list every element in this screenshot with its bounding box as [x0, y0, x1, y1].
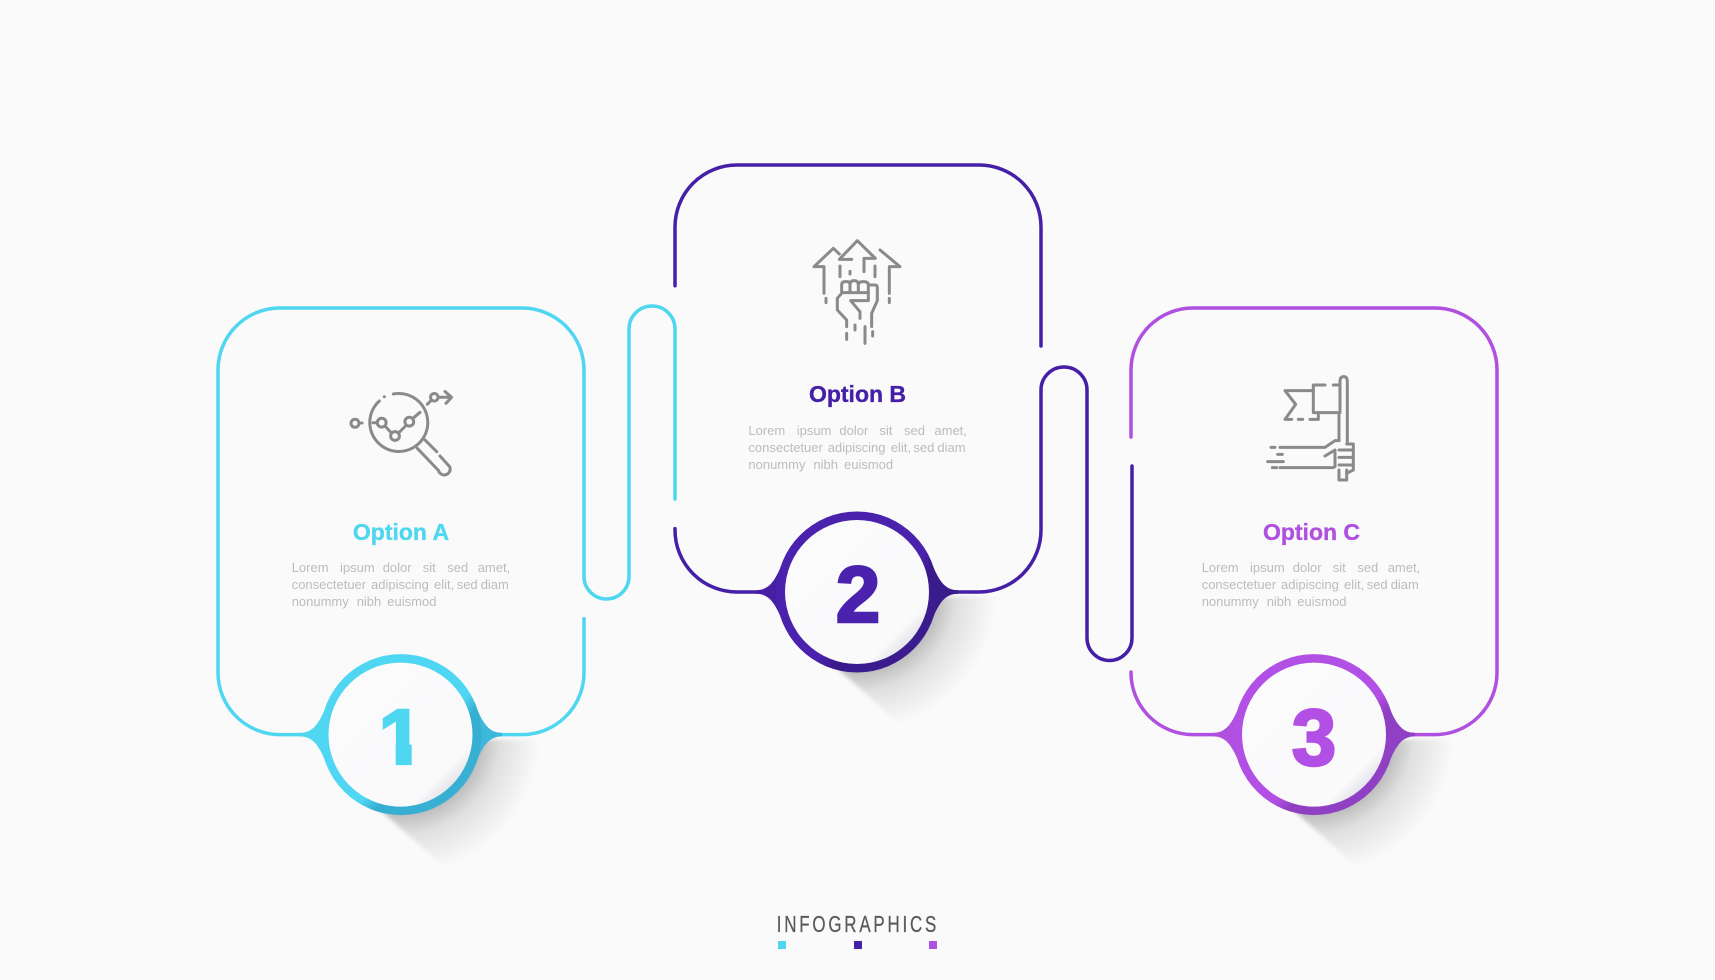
body text: option A: adipiscing: [371, 577, 432, 592]
number badge 1: 1: [378, 693, 423, 782]
icon: hand holding flag: [1268, 377, 1353, 480]
body text: option C: nibh: [1267, 594, 1295, 609]
legend squares: [778, 941, 937, 949]
body text: option B: ipsum: [797, 423, 835, 438]
body text: option C: adipiscing: [1281, 577, 1342, 592]
body text: option B: dolor: [839, 423, 872, 438]
body text: option C: diam: [1391, 577, 1419, 592]
body text: option C: elit,: [1344, 577, 1368, 592]
title: Option B: Option B: [809, 381, 906, 407]
body text: option B: diam: [937, 440, 966, 455]
body text: option B: adipiscing: [828, 440, 889, 455]
body text: option C: ipsum: [1250, 560, 1288, 575]
body text: option A: nibh: [357, 594, 385, 609]
number badge 2: 2: [836, 550, 880, 639]
body text: option C: sed: [1367, 577, 1391, 592]
body text: option B: sed: [904, 423, 929, 438]
body text: option A: ipsum: [340, 560, 378, 575]
icon: magnifier over chart: [351, 392, 452, 475]
panel: option B: [675, 165, 1132, 732]
body text: option A: sed: [447, 560, 472, 575]
body text: option B: consectetuer: [748, 440, 826, 455]
body text: option B: Lorem: [748, 423, 789, 438]
body text: option B: elit,: [891, 440, 915, 455]
body text: option C: euismod: [1297, 594, 1346, 609]
body text: option A: consectetuer: [292, 577, 370, 592]
body text: option A: nonummy: [292, 594, 352, 609]
body text: option C: dolor: [1293, 560, 1325, 575]
title: Option A: Option A: [353, 519, 449, 545]
body text: option C: consectetuer: [1202, 577, 1280, 592]
body text: option C: sed: [1357, 560, 1382, 575]
title: Option C: Option C: [1263, 519, 1360, 545]
number badge 1: [300, 654, 528, 856]
body text: option B: amet,: [934, 423, 967, 438]
outline with connector: option B: [675, 165, 1132, 660]
body text: option A: sit: [423, 560, 439, 575]
panel: option C: [1131, 308, 1497, 875]
body text: option B: nibh: [813, 457, 842, 472]
body text: option A: elit,: [434, 577, 458, 592]
body text: option A: dolor: [383, 560, 415, 575]
body text: option B: sed: [913, 440, 938, 455]
body text: option A: amet,: [478, 560, 510, 575]
body text: option B: euismod: [844, 457, 893, 472]
outline with connector: option A: [218, 306, 675, 735]
body text: option A: diam: [481, 577, 509, 592]
body text: option B: sit: [879, 423, 896, 438]
icon: raised fist with arrows: [814, 241, 900, 343]
body text: option C: sit: [1333, 560, 1349, 575]
panel: option A: [218, 306, 675, 875]
body text: option C: nonummy: [1202, 594, 1262, 609]
body text: option A: euismod: [387, 594, 436, 609]
infographic canvas: [216, 163, 1499, 949]
heading: INFOGRAPHICS: INFOGRAPHICS: [777, 911, 939, 938]
number badge 3: 3: [1292, 693, 1336, 782]
body text: option B: nonummy: [748, 457, 809, 472]
number badge 3: [1213, 654, 1454, 875]
body text: option C: amet,: [1388, 560, 1420, 575]
body text: option A: Lorem: [292, 560, 332, 575]
outline with connector: option C: [1131, 308, 1497, 735]
body text: option A: sed: [457, 577, 481, 592]
body text: option C: Lorem: [1202, 560, 1242, 575]
number badge 2: [756, 512, 997, 732]
